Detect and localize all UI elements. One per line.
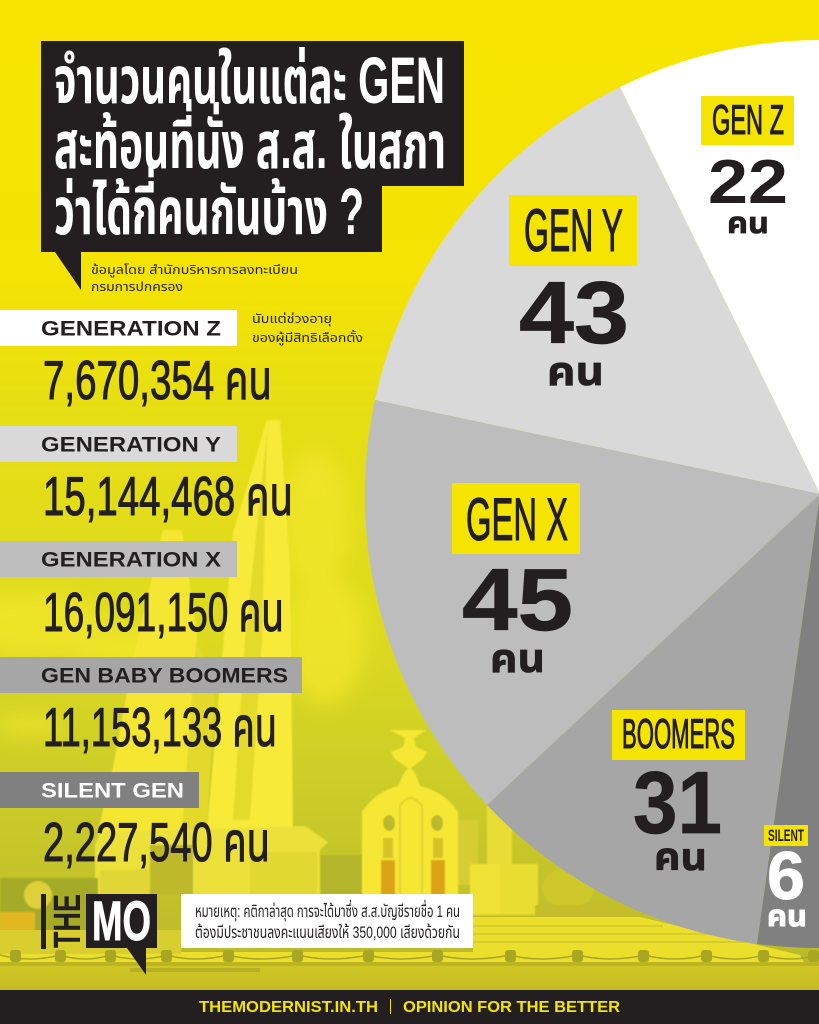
pie label: Boomers 31 (612, 710, 745, 879)
pie label: Gen Y 43: 43 (519, 263, 629, 362)
row: Generation X: 16,091,150 คน (43, 581, 284, 643)
slice: Gen Z (620, 40, 819, 494)
pie label: Gen X 45: คน (490, 637, 545, 681)
row: Generation Y (0, 426, 293, 527)
dome building (362, 730, 458, 895)
title text (54, 43, 446, 248)
pie label: Gen Z 22: คน (727, 208, 769, 240)
logo: The MO: MO (92, 889, 151, 952)
source credit (91, 263, 298, 294)
row: Generation Y: 15,144,468 คน (43, 465, 293, 527)
pie label: Gen X 45: GEN X (466, 486, 568, 553)
row: Gen Baby Boomers (0, 657, 302, 758)
row: Generation X: GENERATION X (41, 548, 221, 572)
row: Gen Baby Boomers: 11,153,133 คน (43, 696, 277, 758)
slice: Gen X (365, 400, 819, 805)
row: Gen Baby Boomers: GEN BABY BOOMERS (41, 664, 288, 688)
row: Generation X (0, 541, 284, 643)
slice: Boomers (487, 494, 819, 944)
pie label: Boomers 31: คน (654, 837, 707, 879)
footer bar (0, 990, 819, 1024)
title text: ว่าได้กี่คนกันบ้าง ? (54, 165, 364, 248)
pie chart: MPs per generation (365, 40, 819, 948)
pie label: Gen X 45 (452, 483, 580, 681)
row: Generation Z (0, 310, 272, 411)
footnote box (181, 894, 473, 948)
title text: จำนวนคนในแต่ละ GEN (54, 43, 445, 117)
title text: สะท้อนที่นั่ง ส.ส. ในสภา (54, 99, 446, 182)
pie label: Gen Y 43 (509, 195, 637, 394)
pie label: Silent 6 (764, 825, 808, 933)
pie label: Gen Y 43: GEN Y (524, 197, 623, 264)
pie label: Gen Z 22: 22 (708, 148, 788, 217)
source credit: กรมการปกครอง (91, 280, 183, 294)
age-range note (252, 312, 363, 345)
age-range note: นับแต่ช่วงอายุ (252, 312, 332, 326)
pie label: Silent 6: 6 (767, 838, 805, 914)
source credit: ข้อมูลโดย สำนักบริหารการลงทะเบียน (91, 263, 298, 277)
footnote box: หมายเหตุ: คติกาล่าสุด การจะได้มาซึ่ง ส.ส.บัญชีรายชื่อ 1 คน (195, 899, 460, 922)
slice: Silent (757, 494, 819, 948)
row: Generation Y: GENERATION Y (41, 434, 221, 456)
pie label: Gen Y 43: คน (547, 350, 604, 394)
footer bar: THEMODERNIST.IN.TH (199, 999, 378, 1016)
logo: The MO (41, 889, 157, 975)
pie label: Silent 6: คน (767, 901, 807, 933)
row: Silent Gen: 2,227,540 คน (43, 811, 270, 873)
row: Generation Z: GENERATION Z (41, 318, 221, 340)
row: Generation Z: 7,670,354 คน (43, 349, 272, 411)
row: Silent Gen: SILENT GEN (41, 780, 184, 802)
logo: The MO: THE (47, 894, 89, 948)
footer bar: OPINION FOR THE BETTER (403, 999, 620, 1016)
footnote box: ต้องมีประชาชนลงคะแนนเสียงให้ 350,000 เสียงด้วยกัน (195, 922, 460, 942)
pie label: Gen X 45: 45 (462, 550, 573, 649)
age-range note: ของผู้มีสิทธิเลือกตั้ง (252, 330, 363, 345)
pie label: Boomers 31: 31 (633, 753, 722, 852)
row: Silent Gen (0, 772, 270, 873)
slice: Gen Y (375, 87, 819, 494)
pie label: Gen Z 22 (701, 96, 794, 240)
title speech bubble (41, 41, 464, 290)
